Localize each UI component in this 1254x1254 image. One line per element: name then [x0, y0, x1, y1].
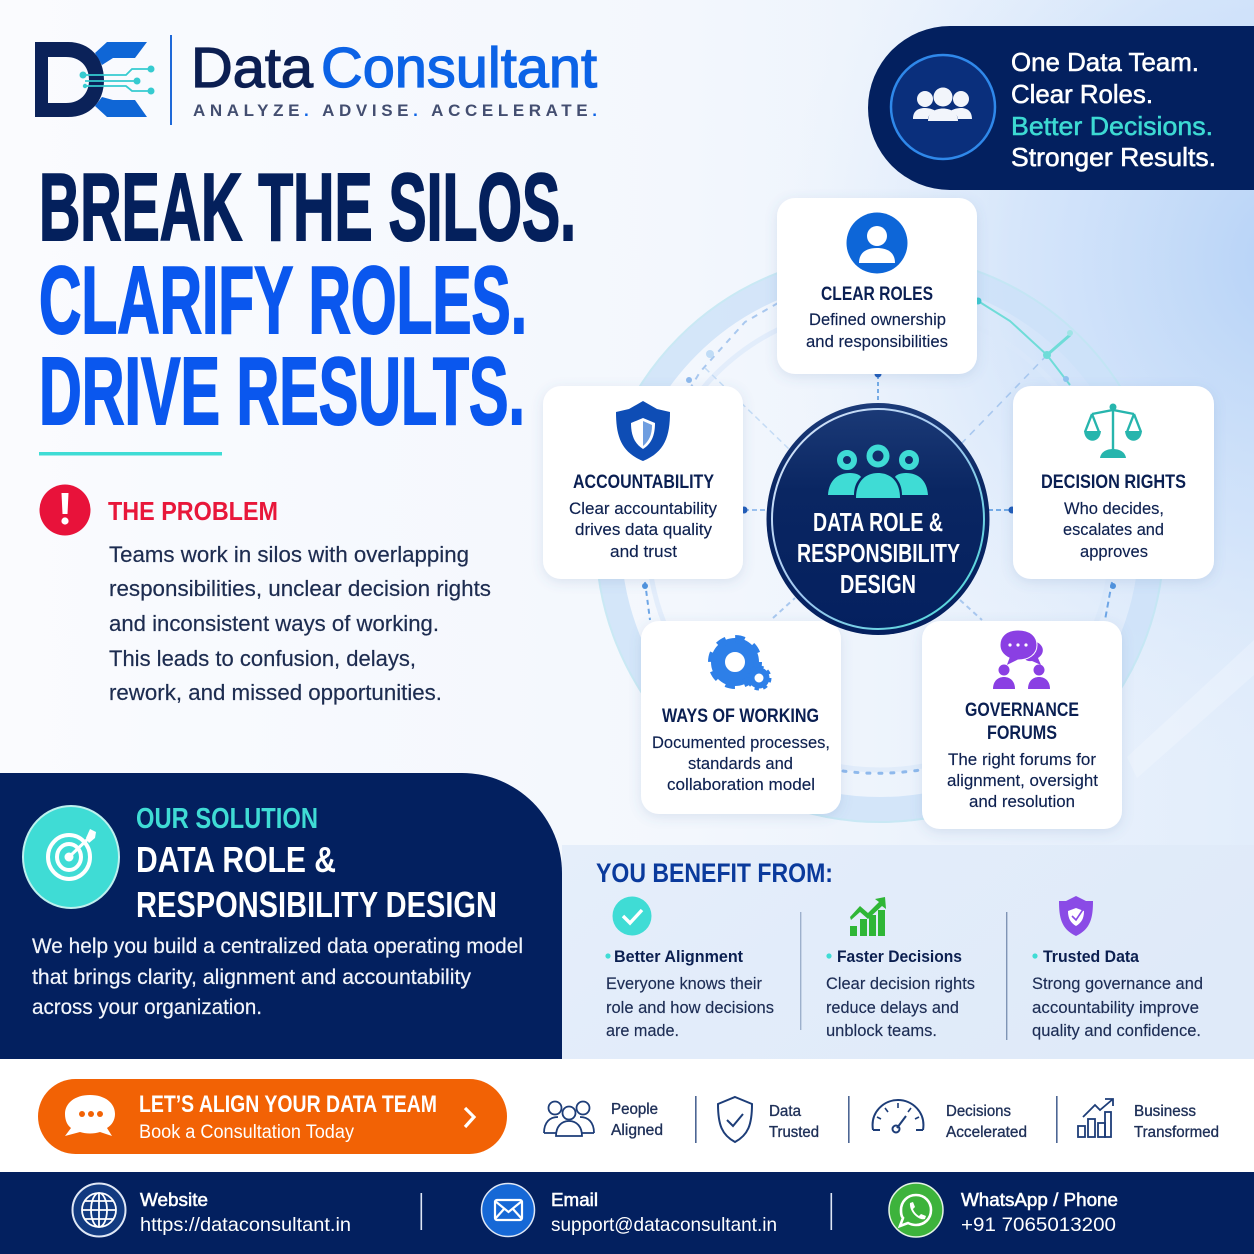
- benefit: faster decisions: Faster Decisions: [837, 947, 962, 966]
- central hub circle: DATA ROLE &: [813, 507, 943, 537]
- card: accountability: [543, 386, 743, 579]
- benefit: trusted data: Trusted Data: [1043, 947, 1139, 966]
- card: governance forums: The right forums for: [948, 750, 1096, 769]
- central hub circle: [766, 403, 990, 635]
- headline: CLARIFY ROLES.: [39, 248, 527, 354]
- card: decision rights: Who decides,: [1064, 499, 1164, 518]
- contact: email: Email: [551, 1189, 598, 1210]
- card: decision rights: approves: [1080, 542, 1148, 561]
- icon: gears: [712, 639, 770, 688]
- contact: website: https://dataconsultant.in: [140, 1214, 351, 1236]
- card: governance forums: alignment, oversight: [947, 771, 1098, 790]
- icon: chat bubble: [65, 1095, 115, 1136]
- problem text: rework, and missed opportunities.: [109, 680, 442, 705]
- card: ways of working: [641, 621, 841, 814]
- item: business transformed: Business: [1134, 1103, 1196, 1120]
- item: decisions accelerated: [873, 1100, 1027, 1141]
- logo tagline: ANALYZE . ADVISE . ACCELERATE .: [193, 101, 597, 120]
- logo mark: [35, 42, 154, 117]
- card: clear roles: [777, 198, 977, 374]
- problem heading: THE PROBLEM: [108, 496, 278, 526]
- solution panel: [0, 773, 562, 1059]
- benefit: faster decisions: Clear decision rights: [826, 975, 975, 993]
- benefit: faster decisions: [826, 897, 975, 1040]
- contact: whatsapp: [889, 1183, 1118, 1237]
- contact: website: [72, 1184, 351, 1236]
- proof strip: [0, 1059, 1254, 1172]
- problem text: responsibilities, unclear decision rights: [109, 576, 491, 601]
- icon: chevron: [465, 1108, 474, 1127]
- footer contact bar: [0, 1172, 1254, 1254]
- problem text: This leads to confusion, delays,: [109, 646, 416, 671]
- contact: website: Website: [140, 1189, 208, 1210]
- orbit ring: [596, 254, 1164, 822]
- solution text: [32, 934, 523, 1019]
- benefit: better alignment: Everyone knows their: [606, 975, 762, 993]
- card: accountability: ACCOUNTABILITY: [573, 472, 714, 493]
- item: business transformed: Transformed: [1134, 1124, 1219, 1141]
- headline: [39, 155, 576, 445]
- card: ways of working: standards and: [688, 754, 793, 773]
- item: decisions accelerated: Decisions: [946, 1103, 1011, 1120]
- solution panel: DATA ROLE &: [136, 839, 336, 880]
- contact: whatsapp: WhatsApp / Phone: [961, 1189, 1118, 1210]
- tagline text: Better Decisions.: [1011, 111, 1213, 141]
- card: governance forums: GOVERNANCE: [965, 700, 1079, 721]
- icon: team: [828, 448, 928, 498]
- call to action button: [38, 1079, 507, 1154]
- tagline text: [1011, 47, 1216, 172]
- card: clear roles: CLEAR ROLES: [821, 284, 933, 305]
- central hub circle: RESPONSIBILITY: [797, 538, 960, 568]
- call to action button: Book a Consultation Today: [139, 1122, 354, 1143]
- connector lines: [642, 298, 1116, 773]
- card: governance forums: [922, 621, 1122, 829]
- benefit: faster decisions: reduce delays and: [826, 999, 959, 1017]
- card: accountability: and trust: [610, 542, 677, 561]
- card: decision rights: escalates and: [1063, 520, 1164, 539]
- problem text: [109, 542, 491, 705]
- benefit: trusted data: Strong governance and: [1032, 975, 1203, 993]
- card: accountability: Clear accountability: [569, 499, 717, 518]
- headline: BREAK THE SILOS.: [39, 155, 576, 261]
- card: ways of working: WAYS OF WORKING: [662, 706, 819, 727]
- solution text: that brings clarity, alignment and accountability: [32, 965, 471, 989]
- logo: [35, 35, 597, 125]
- icon: scales: [1084, 404, 1142, 458]
- card: decision rights: [1013, 386, 1214, 579]
- card: ways of working: Documented processes,: [652, 733, 830, 752]
- tagline text: One Data Team.: [1011, 47, 1199, 77]
- benefit: better alignment: Better Alignment: [614, 947, 743, 966]
- benefit: better alignment: are made.: [606, 1022, 679, 1040]
- problem text: Teams work in silos with overlapping: [109, 542, 469, 567]
- headline: DRIVE RESULTS.: [39, 339, 525, 445]
- icon: person: [846, 212, 908, 274]
- benefit: trusted data: quality and confidence.: [1032, 1022, 1201, 1040]
- solution panel: RESPONSIBILITY DESIGN: [136, 884, 497, 925]
- benefit: better alignment: [605, 896, 774, 1040]
- top right tagline panel: [868, 26, 1254, 190]
- background light streak: [1127, 640, 1254, 778]
- solution text: We help you build a centralized data operating model: [32, 934, 523, 958]
- benefit: trusted data: [1032, 896, 1203, 1040]
- tagline text: Clear Roles.: [1011, 79, 1153, 109]
- item: data trusted: Trusted: [769, 1124, 819, 1141]
- solution text: across your organization.: [32, 995, 262, 1019]
- icon: alert: [40, 484, 90, 536]
- tagline text: Stronger Results.: [1011, 142, 1216, 172]
- call to action button: LET’S ALIGN YOUR DATA TEAM: [139, 1091, 437, 1118]
- benefit: better alignment: role and how decisions: [606, 999, 774, 1017]
- icon: target: [23, 806, 119, 908]
- contact: email: [482, 1184, 777, 1236]
- benefit: faster decisions: unblock teams.: [826, 1022, 937, 1040]
- item: people aligned: [544, 1101, 663, 1139]
- card: clear roles: Defined ownership: [809, 310, 946, 329]
- contact: email: support@dataconsultant.in: [551, 1214, 777, 1236]
- item: people aligned: Aligned: [611, 1122, 663, 1139]
- card: ways of working: collaboration model: [667, 775, 815, 794]
- card: decision rights: DECISION RIGHTS: [1041, 472, 1186, 493]
- benefit: trusted data: accountability improve: [1032, 999, 1199, 1017]
- benefits heading: YOU BENEFIT FROM:: [596, 858, 833, 888]
- logo: Consultant: [321, 36, 597, 100]
- card: accountability: drives data quality: [575, 520, 712, 539]
- problem text: and inconsistent ways of working.: [109, 611, 439, 636]
- card: governance forums: FORUMS: [987, 723, 1057, 744]
- benefits panel: [562, 845, 1254, 1059]
- contact: whatsapp: +91 7065013200: [961, 1214, 1116, 1236]
- the problem: [40, 484, 491, 705]
- card: governance forums: and resolution: [969, 792, 1075, 811]
- icon: shield: [616, 401, 670, 461]
- icon: team badge: [891, 55, 995, 159]
- item: data trusted: [718, 1097, 819, 1142]
- item: people aligned: People: [611, 1101, 658, 1118]
- item: data trusted: Data: [769, 1103, 801, 1120]
- logo wordmark: Data: [191, 36, 313, 100]
- item: business transformed: [1078, 1099, 1219, 1141]
- central hub circle: DESIGN: [840, 569, 916, 599]
- card: clear roles: and responsibilities: [806, 332, 948, 351]
- icon: forum people: [993, 630, 1050, 689]
- solution heading: OUR SOLUTION: [136, 803, 318, 835]
- item: decisions accelerated: Accelerated: [946, 1124, 1027, 1141]
